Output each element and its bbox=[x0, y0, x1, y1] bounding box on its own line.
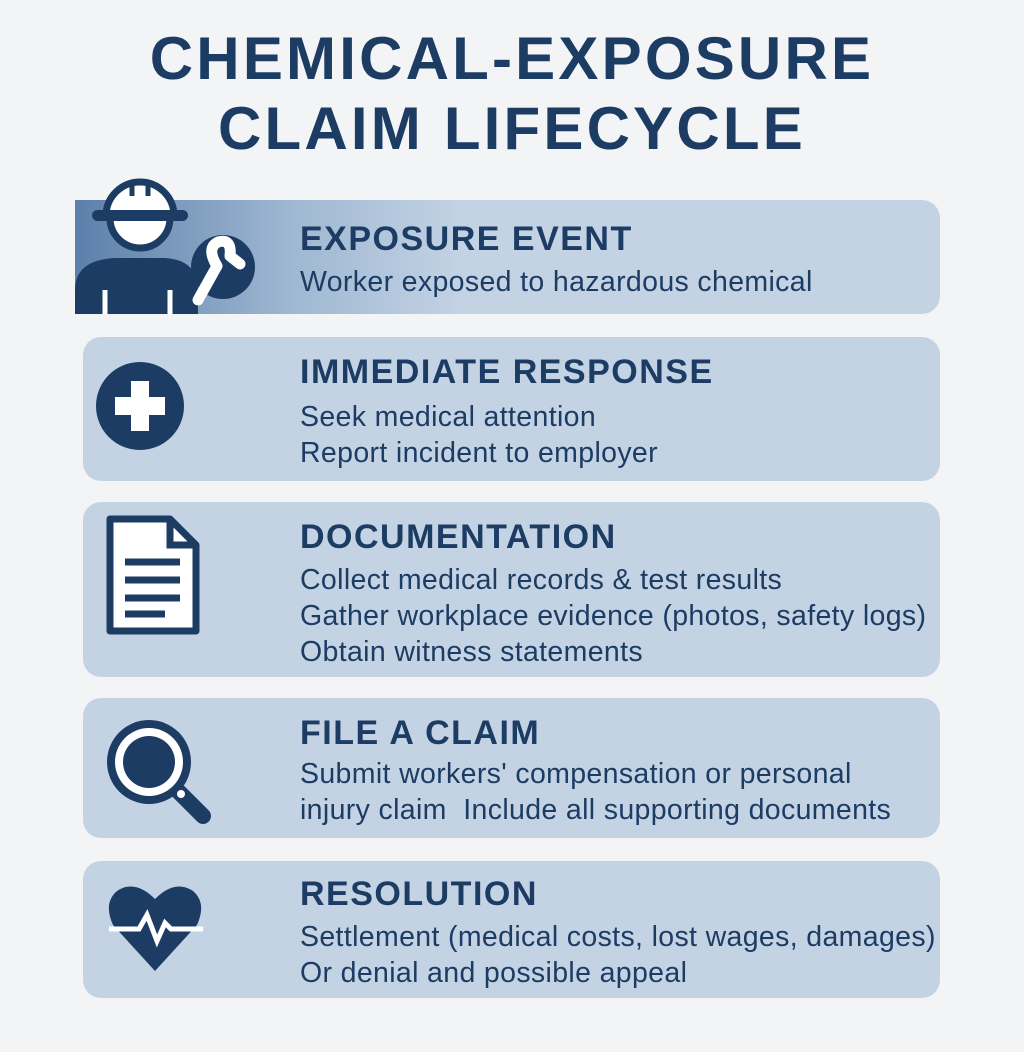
heading: EXPOSURE EVENT bbox=[300, 220, 633, 258]
text bbox=[300, 921, 936, 989]
heading: FILE A CLAIM bbox=[300, 714, 540, 752]
text: injury claim Include all supporting documents bbox=[300, 794, 891, 826]
title bbox=[150, 25, 874, 162]
text: Submit workers' compensation or personal bbox=[300, 758, 852, 790]
text: Seek medical attention bbox=[300, 401, 596, 433]
panel: exposure event bbox=[75, 200, 940, 314]
icon: heart bbox=[108, 886, 203, 971]
text: Collect medical records & test results bbox=[300, 564, 782, 596]
text: Settlement (medical costs, lost wages, damages) bbox=[300, 921, 936, 953]
text: Or denial and possible appeal bbox=[300, 957, 687, 989]
title: CLAIM LIFECYCLE bbox=[218, 95, 806, 162]
text: Report incident to employer bbox=[300, 437, 658, 469]
icon: document bbox=[106, 516, 200, 634]
text bbox=[300, 758, 891, 826]
icon: medical cross bbox=[96, 362, 184, 450]
text: Obtain witness statements bbox=[300, 636, 643, 668]
text bbox=[300, 564, 926, 668]
text bbox=[300, 401, 658, 469]
icon: magnifier bbox=[107, 720, 211, 824]
title: CHEMICAL-EXPOSURE bbox=[150, 25, 874, 92]
panel: resolution bbox=[83, 861, 940, 998]
text: Worker exposed to hazardous chemical bbox=[300, 266, 813, 298]
panel: file a claim bbox=[83, 698, 940, 838]
heading: IMMEDIATE RESPONSE bbox=[300, 353, 714, 391]
panel: immediate response bbox=[83, 337, 940, 481]
panel: documentation bbox=[83, 502, 940, 677]
heading: DOCUMENTATION bbox=[300, 518, 617, 556]
heading: RESOLUTION bbox=[300, 875, 538, 913]
text: Gather workplace evidence (photos, safety logs) bbox=[300, 600, 926, 632]
icon: worker bbox=[75, 178, 255, 314]
